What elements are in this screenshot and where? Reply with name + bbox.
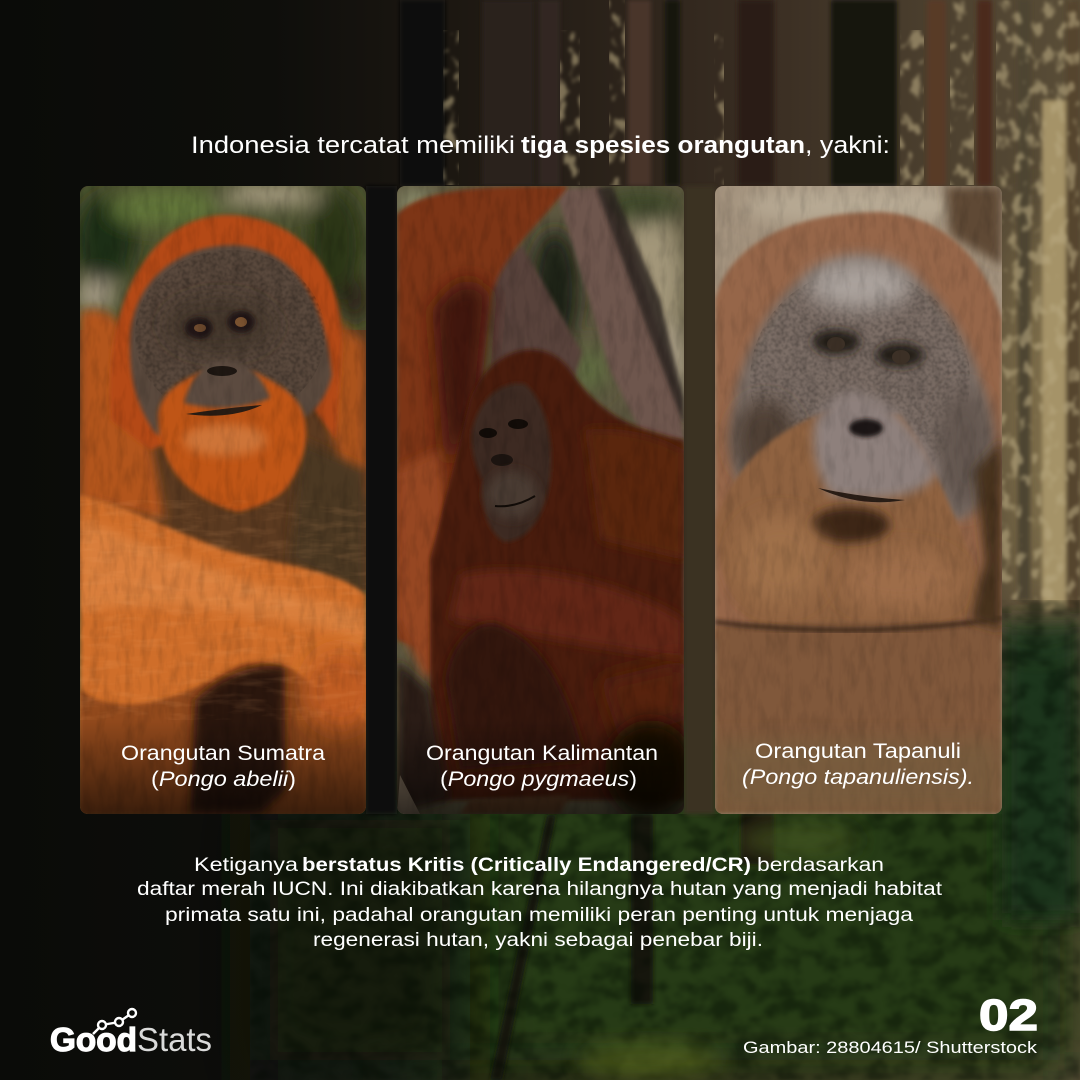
icon: rising line with nodes — [93, 1009, 136, 1034]
body paragraph — [137, 855, 943, 951]
title — [191, 132, 890, 159]
title: Indonesia tercatat memiliki — [191, 132, 515, 159]
caption: Orangutan Kalimantan — [426, 742, 658, 791]
body paragraph: Ketiganya — [194, 855, 299, 876]
caption: Orangutan Tapanuli — [742, 740, 974, 789]
caption: Orangutan Sumatra: Orangutan Sumatra — [121, 742, 325, 765]
title: tiga spesies orangutan — [521, 132, 805, 159]
body paragraph: berstatus Kritis (Critically Endangered/CR) — [302, 855, 751, 876]
wordmark: Good — [50, 1021, 137, 1058]
page number: 02 — [979, 991, 1038, 1040]
foliage texture — [250, 600, 1080, 1080]
caption: Orangutan Kalimantan: Orangutan Kalimantan — [426, 742, 658, 765]
caption: Orangutan Tapanuli: (Pongo tapanuliensis). — [742, 766, 974, 789]
caption: Orangutan Sumatra: (Pongo abelii ) — [151, 768, 296, 791]
body paragraph: daftar merah IUCN. Ini diakibatkan karena hilangnya hutan yang menjadi habitat — [137, 879, 943, 900]
body paragraph: berdasarkan — [757, 855, 884, 876]
wordmark — [50, 1021, 212, 1058]
panel: Orangutan Kalimantan — [397, 186, 695, 820]
caption: Orangutan Sumatra — [121, 742, 325, 791]
panel: Orangutan Sumatra — [73, 183, 375, 814]
caption: Orangutan Kalimantan: (Pongo pygmaeus ) — [440, 768, 637, 791]
body paragraph: primata satu ini, padahal orangutan memiliki peran penting untuk menjaga — [165, 905, 914, 926]
logo: GoodStats — [50, 1009, 212, 1058]
photo: Sumatran orangutan — [73, 183, 375, 814]
body paragraph: regenerasi hutan, yakni sebagai penebar biji. — [313, 930, 763, 951]
caption: Orangutan Tapanuli: Orangutan Tapanuli — [755, 740, 961, 763]
title: , yakni: — [805, 132, 890, 159]
panel: Orangutan Tapanuli — [715, 185, 1002, 814]
sunlight bokeh between trunks — [443, 0, 1080, 600]
wordmark: Stats — [137, 1021, 212, 1058]
photo: Bornean orangutan — [397, 186, 695, 820]
photo: Tapanuli orangutan — [715, 185, 1002, 814]
image credit: Gambar: 28804615/ Shutterstock — [743, 1038, 1038, 1057]
